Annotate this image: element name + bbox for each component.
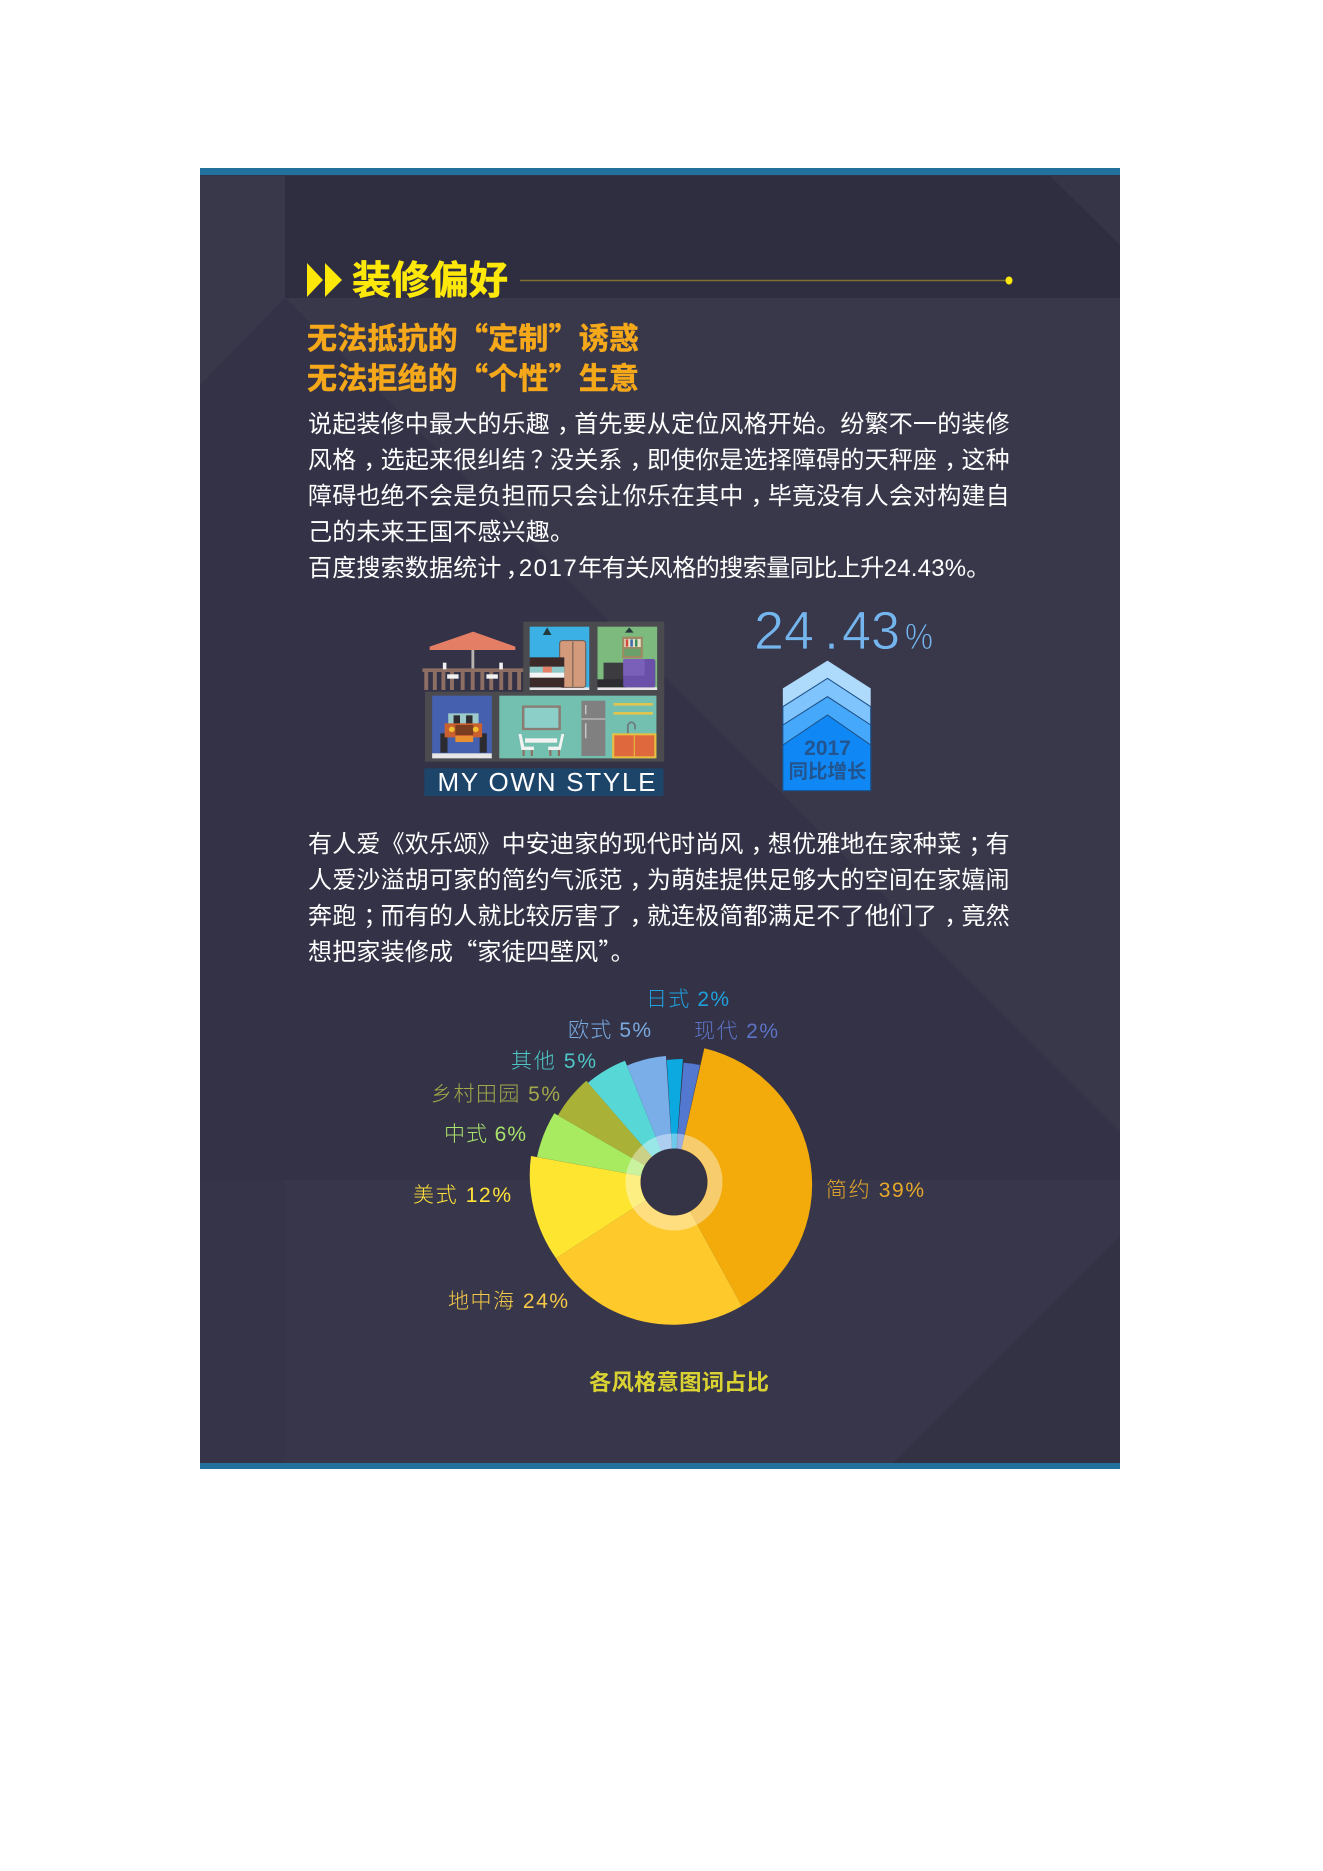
stat: 24.43%: 24 — [754, 601, 814, 661]
heading: 装修偏好: 装修偏好 — [352, 260, 508, 303]
illustration: my own style house — [422, 622, 664, 797]
text block: intro: 百度搜索数据统计，2017年有关风格的搜索量同比上升24.43%。 — [308, 555, 991, 582]
slice: 欧式 5% — [627, 1056, 674, 1182]
stat: 24.43%: 43 — [842, 601, 900, 661]
chart labels: 简约 39% — [826, 1179, 924, 1202]
text block: intro — [308, 411, 1010, 582]
chart labels: 乡村田园 5% — [431, 1083, 560, 1106]
subheading: 无法拒绝的“个性”生意 — [307, 354, 639, 398]
panel: dark background — [200, 168, 1120, 1469]
heading: 装修偏好 — [307, 260, 1012, 303]
chart labels: 现代 2% — [694, 1020, 778, 1043]
stat: 24.43%: % — [905, 616, 933, 657]
text block: styles — [308, 831, 1010, 967]
chart caption: 各风格意图词占比 — [589, 1370, 769, 1395]
chart labels: 美式 12% — [413, 1184, 511, 1207]
chart labels: 中式 6% — [444, 1123, 526, 1146]
icon: growth arrow: 2017 — [804, 737, 851, 760]
subheading: 无法抵抗的“定制”诱惑 — [307, 314, 639, 358]
text block: styles: 想把家装修成“家徒四壁风”。 — [308, 932, 635, 967]
slice: 美式 12% — [530, 1156, 674, 1258]
chart labels: 日式 2% — [646, 988, 729, 1011]
slice: 地中海 24% — [556, 1182, 742, 1325]
subheading — [307, 314, 639, 398]
slice: 乡村田园 5% — [558, 1081, 674, 1182]
slice: 日式 2% — [667, 1059, 683, 1182]
text block: styles: 有人爱《欢乐颂》中安迪家的现代时尚风 ，想优雅地在家种菜 ；有 — [308, 831, 1010, 858]
text block: styles: 人爱沙溢胡可家的简约气派范 ，为萌娃提供足够大的空间在家嬉闹 — [308, 867, 1010, 894]
icon: growth arrow — [783, 661, 871, 791]
slice: 其他 5% — [588, 1061, 674, 1182]
illustration: my own style house: MY OWN STYLE — [438, 767, 656, 797]
slice: 现代 2% — [674, 1063, 700, 1182]
icon: growth arrow: 同比增长 — [788, 761, 867, 783]
chart: style pie — [530, 1048, 812, 1325]
chart labels — [413, 988, 924, 1313]
chart labels: 地中海 24% — [448, 1290, 568, 1313]
text block: styles: 奔跑 ；而有的人就比较厉害了 ，就连极简都满足不了他们了 ，竟然 — [308, 903, 1010, 930]
slice: 中式 6% — [537, 1113, 674, 1182]
text block: intro: 说起装修中最大的乐趣 ，首先要从定位风格开始。纷繁不一的装修 — [308, 411, 1010, 438]
stat: 24.43%: . — [824, 601, 839, 661]
slice: 简约 39% — [674, 1048, 812, 1306]
chart labels: 其他 5% — [511, 1050, 596, 1073]
text block: intro: 障碍也绝不会是负担而只会让你乐在其中 ，毕竟没有人会对构建自 — [308, 483, 1010, 510]
icon: double arrow — [307, 263, 342, 297]
chart labels: 欧式 5% — [568, 1019, 651, 1042]
text block: intro: 己的未来王国不感兴趣。 — [308, 519, 574, 546]
text block: intro: 风格 ，选起来很纠结？没关系 ，即使你是选择障碍的天秤座 ，这种 — [308, 447, 1010, 474]
stat: 24.43% — [754, 601, 933, 661]
